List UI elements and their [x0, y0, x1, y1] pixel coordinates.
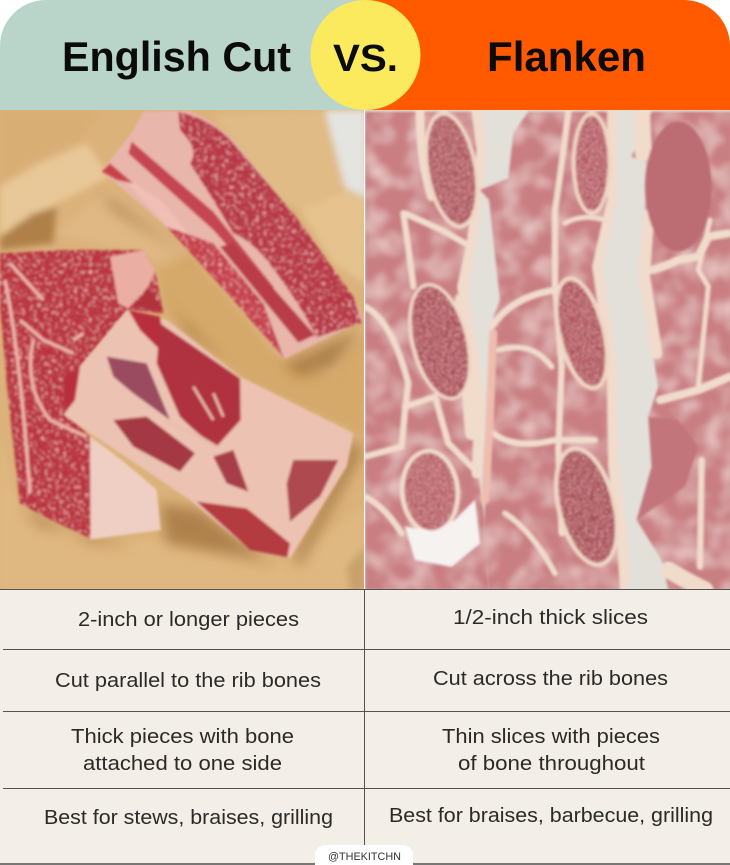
row 4: best uses: Best for braises, barbecue, grilling: [389, 805, 713, 827]
meat: middle strip: [480, 112, 631, 590]
row 1: size: [78, 607, 648, 631]
shadows under meat: [20, 190, 362, 567]
row 3: shape: attached to one side: [83, 753, 282, 775]
row 1: size: 1/2-inch thick slices: [453, 607, 648, 629]
row 1: size: 2-inch or longer pieces: [78, 609, 299, 631]
row 4: best uses: [44, 805, 713, 829]
row 3: shape: of bone throughout: [458, 753, 645, 775]
meat: front rib: [63, 310, 353, 558]
row 4: best uses: Best for stews, braises, grilling: [44, 807, 333, 829]
comparison table: [0, 589, 730, 865]
header right panel: [365, 0, 730, 110]
row 2: cut direction: [55, 668, 668, 692]
header left panel: [0, 0, 365, 110]
photo: English cut short ribs on parchment paper: [0, 110, 367, 590]
header: English Cut vs. Flanken: [0, 0, 730, 110]
credit tag: @THEKITCHN: [315, 845, 413, 865]
table background: [0, 589, 730, 865]
VS badge: [310, 0, 420, 110]
row 3: shape: Thin slices with pieces: [442, 726, 660, 748]
row 3: shape: Thick pieces with bone: [71, 726, 294, 748]
row 2: cut direction: Cut across the rib bones: [433, 668, 668, 690]
row 2: cut direction: Cut parallel to the rib bones: [55, 670, 321, 692]
heading: English Cut: English Cut: [62, 33, 291, 80]
meat: left rib: [0, 250, 163, 539]
VS badge: VS.: [333, 38, 398, 80]
meat: top rib: [102, 111, 363, 359]
credit tag: @THEKITCHN: @THEKITCHN: [328, 851, 401, 863]
heading: Flanken: Flanken: [487, 33, 646, 80]
paper folds: [0, 110, 367, 590]
row 3: shape: [71, 726, 660, 775]
meat: right strip: [632, 112, 730, 590]
photo: Flanken short ribs on white surface: [365, 107, 730, 590]
meat: left strip: [365, 107, 489, 590]
